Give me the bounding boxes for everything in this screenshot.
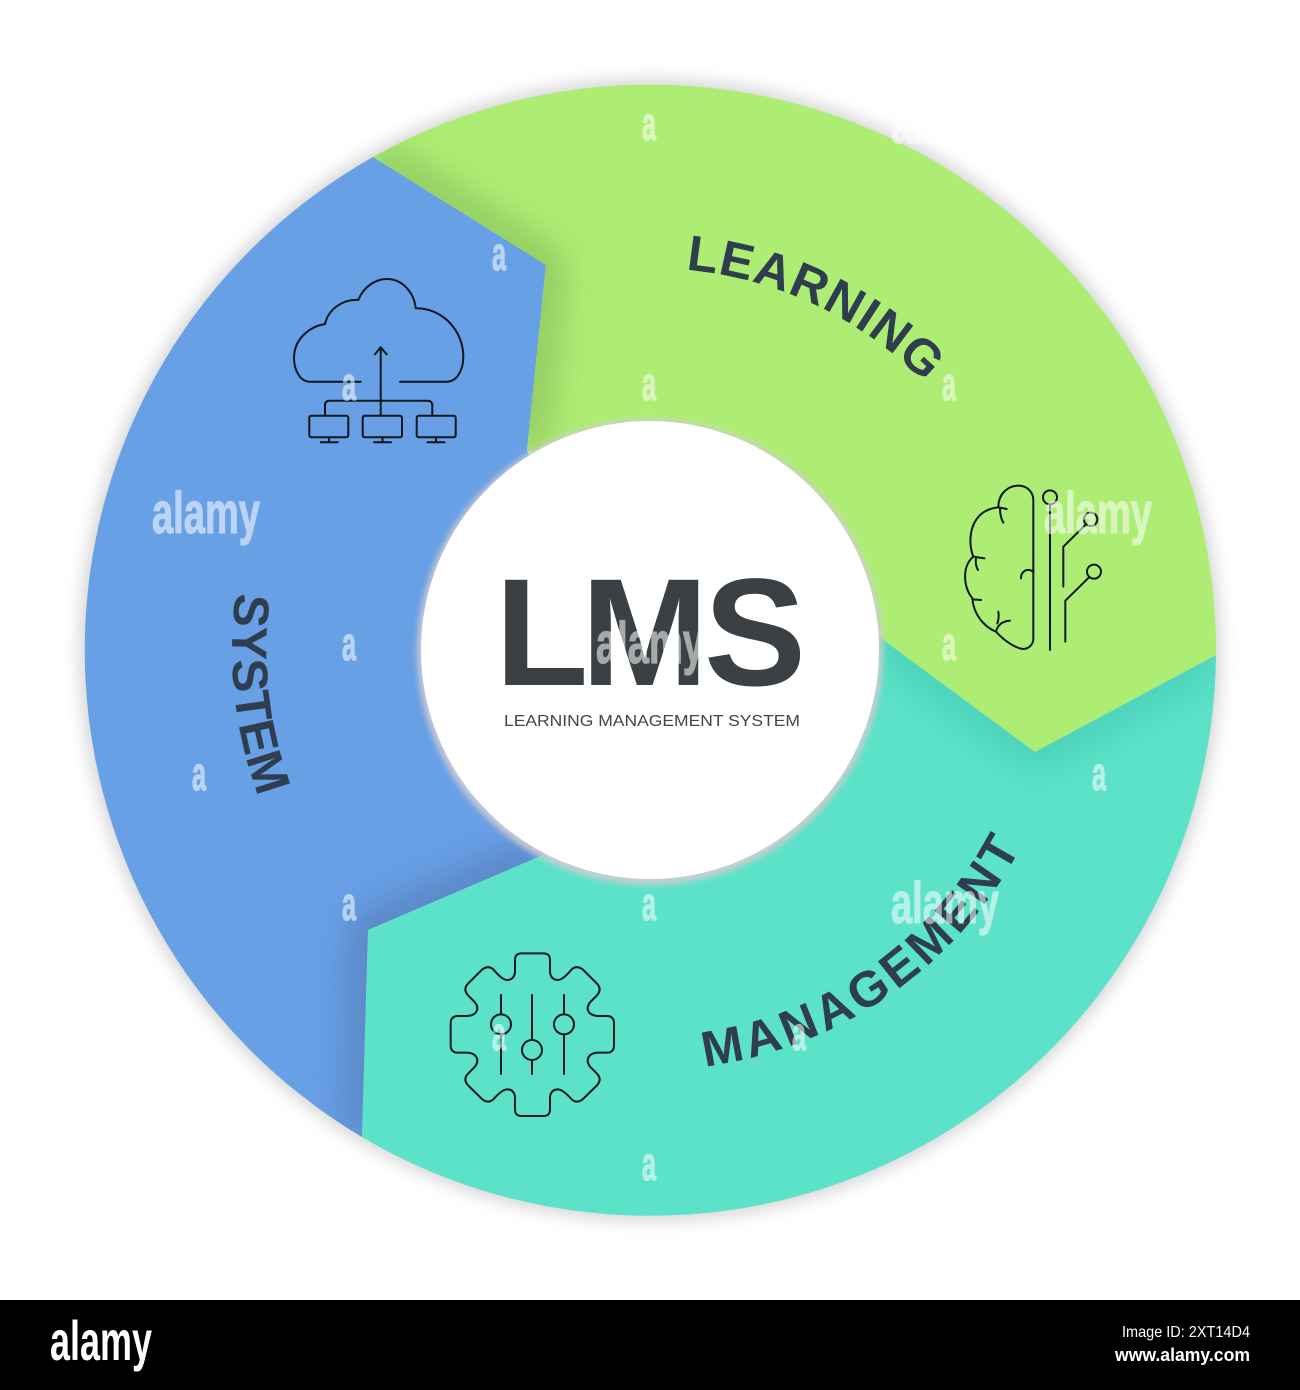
watermarks: a: [642, 97, 656, 150]
watermarks: a: [942, 357, 956, 410]
label: Learning: LEARNING: [689, 236, 941, 376]
watermarks: a: [642, 877, 656, 930]
shadow cast on blue by teal arrow tip: [362, 855, 543, 1137]
watermarks: alamy: [596, 611, 704, 676]
watermarks: [152, 91, 1152, 1190]
subtitle: LEARNING MANAGEMENT SYSTEM: [504, 713, 800, 730]
label: Management: MANAGEMENT: [702, 831, 1015, 1066]
centre circle shadow: [417, 419, 883, 885]
watermarks: alamy: [1044, 481, 1152, 546]
watermarks: a: [642, 357, 656, 410]
watermarks: a: [342, 617, 356, 670]
watermarks: a: [942, 617, 956, 670]
ring segment: System (blue): [85, 157, 600, 1137]
icon: gear with sliders: [451, 953, 614, 1116]
watermarks: a: [642, 1137, 656, 1190]
watermarks: a: [792, 1007, 806, 1060]
shadow cast on teal by green arrow tip: [878, 636, 1216, 752]
label: System: SYSTEM: [232, 594, 290, 794]
shadow cast on green by blue arrow tip: [373, 157, 546, 450]
icon: brain circuit: [965, 486, 1101, 650]
footer bar: [0, 1300, 1300, 1390]
watermarks: a: [192, 747, 206, 800]
outer ring shadow: [79, 79, 1221, 1221]
heading: LMS: S: [704, 547, 806, 718]
footer url: www.alamy.com: [1114, 1345, 1250, 1365]
watermarks: a: [492, 227, 506, 280]
watermarks: alamy: [891, 871, 999, 936]
heading: LMS: L: [495, 547, 588, 718]
ring segment: Management (teal): [362, 636, 1216, 1216]
watermarks: alamy: [152, 481, 260, 546]
watermarks: alamy: [891, 91, 999, 156]
ring segment: Learning (green): [373, 85, 1216, 752]
centre white circle: [421, 421, 879, 879]
icon: cloud network: [294, 279, 463, 442]
watermarks: a: [492, 1007, 506, 1060]
footer image id: Image ID: 2XT14D4: [1122, 1324, 1250, 1341]
watermarks: a: [342, 877, 356, 930]
footer logo: alamy: [50, 1309, 152, 1372]
watermarks: a: [1092, 747, 1106, 800]
watermarks: a: [342, 357, 356, 410]
heading: LMS: M: [581, 547, 708, 718]
